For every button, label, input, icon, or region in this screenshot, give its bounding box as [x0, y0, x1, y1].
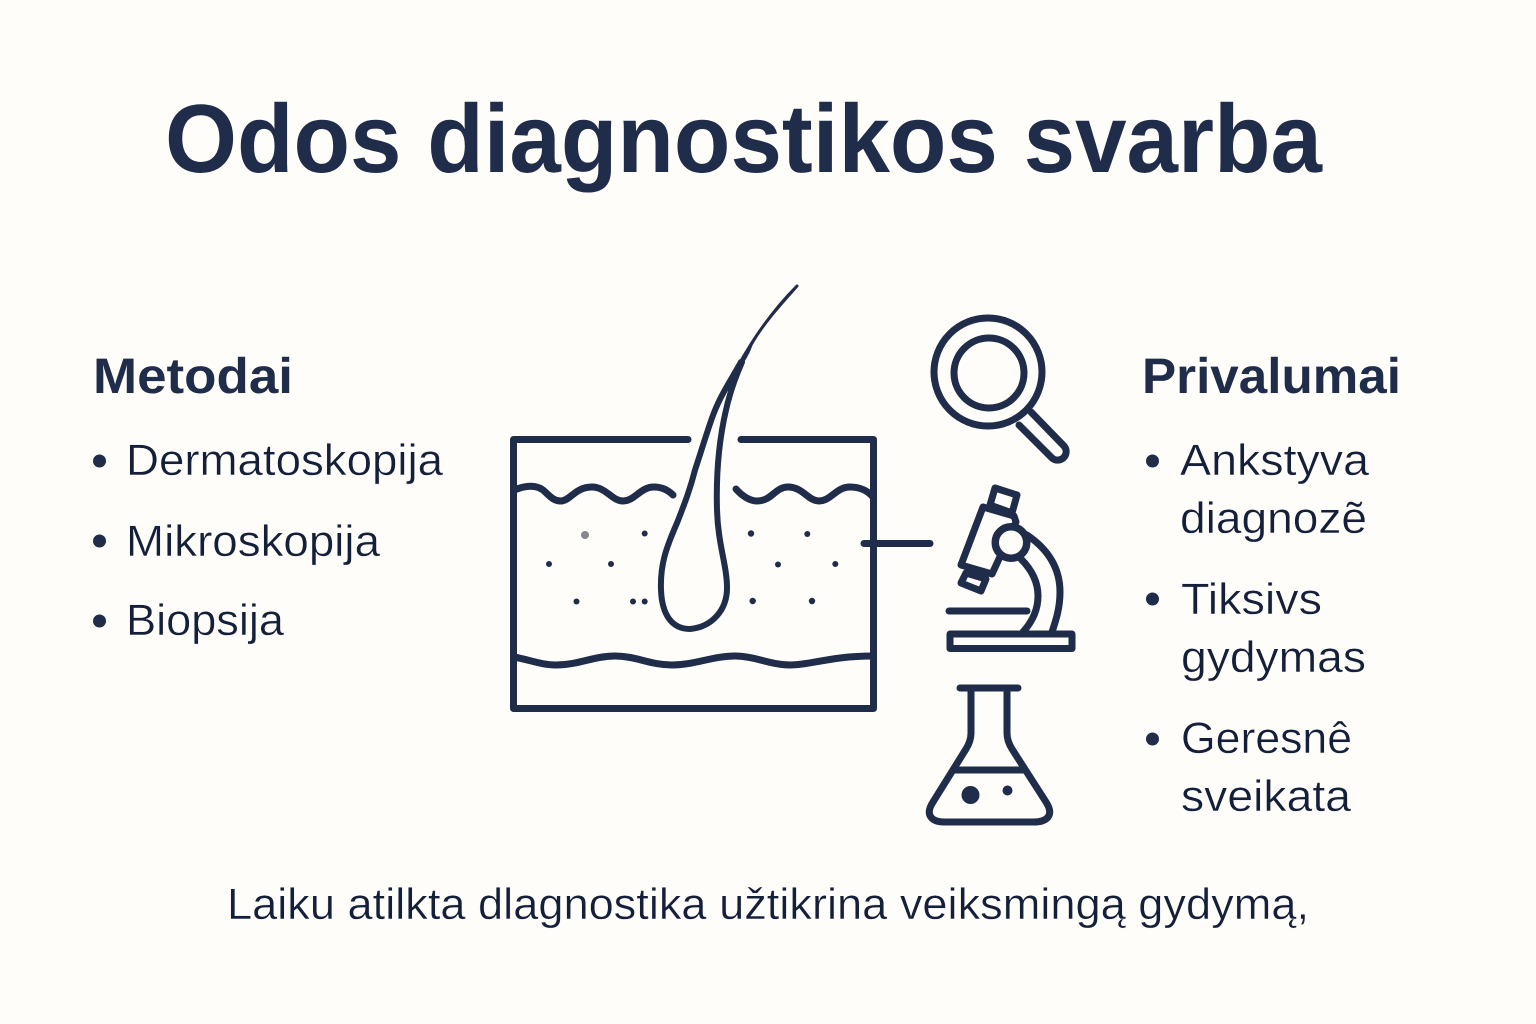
list item: better health: Geresnê [1181, 714, 1352, 763]
dermis dots [546, 530, 838, 604]
icon: magnifying glass [934, 318, 1066, 460]
list item: precise treatment: gydymas [1181, 633, 1366, 682]
title: Odos diagnostikos svarba [165, 84, 1323, 193]
panel: methods [93, 348, 444, 645]
skin cross-section diagram [514, 286, 874, 708]
heading: methods: Metodai [93, 348, 293, 404]
list item: dermatoscopy: Dermatoskopija [126, 436, 444, 485]
objective [961, 573, 986, 591]
panel: benefits [1142, 348, 1401, 821]
hair and follicle [661, 286, 797, 629]
footer statement: Laiku atilkta dlagnostika užtikrina veiksmingą gydymą, [227, 880, 1309, 929]
connector line [864, 540, 930, 547]
skin box outline [514, 440, 874, 708]
icon: microscope [949, 488, 1072, 648]
arm [1027, 535, 1060, 632]
list item: early diagnosis: diagnozẽ [1180, 494, 1367, 543]
list item: precise treatment: Tiksivs [1181, 575, 1322, 624]
lower skin wave [514, 656, 873, 665]
upper skin wave, right [736, 487, 873, 501]
tube [961, 507, 1016, 574]
list item: microscopy: Mikroskopija [126, 517, 381, 566]
eyepiece [990, 488, 1017, 513]
icon: lab flask [929, 688, 1050, 822]
upper skin wave, left [514, 486, 673, 501]
list item: precise treatment [1146, 575, 1366, 682]
list item: early diagnosis: Ankstyva [1180, 436, 1370, 485]
list item: biopsy: Biopsija [126, 596, 285, 645]
joint [995, 527, 1027, 558]
heading: benefits: Privalumai [1142, 348, 1401, 404]
base [950, 634, 1072, 648]
list item: early diagnosis [1146, 436, 1370, 543]
stage [949, 608, 1027, 614]
list item: better health [1146, 714, 1352, 821]
list item: better health: sveikata [1181, 772, 1352, 821]
